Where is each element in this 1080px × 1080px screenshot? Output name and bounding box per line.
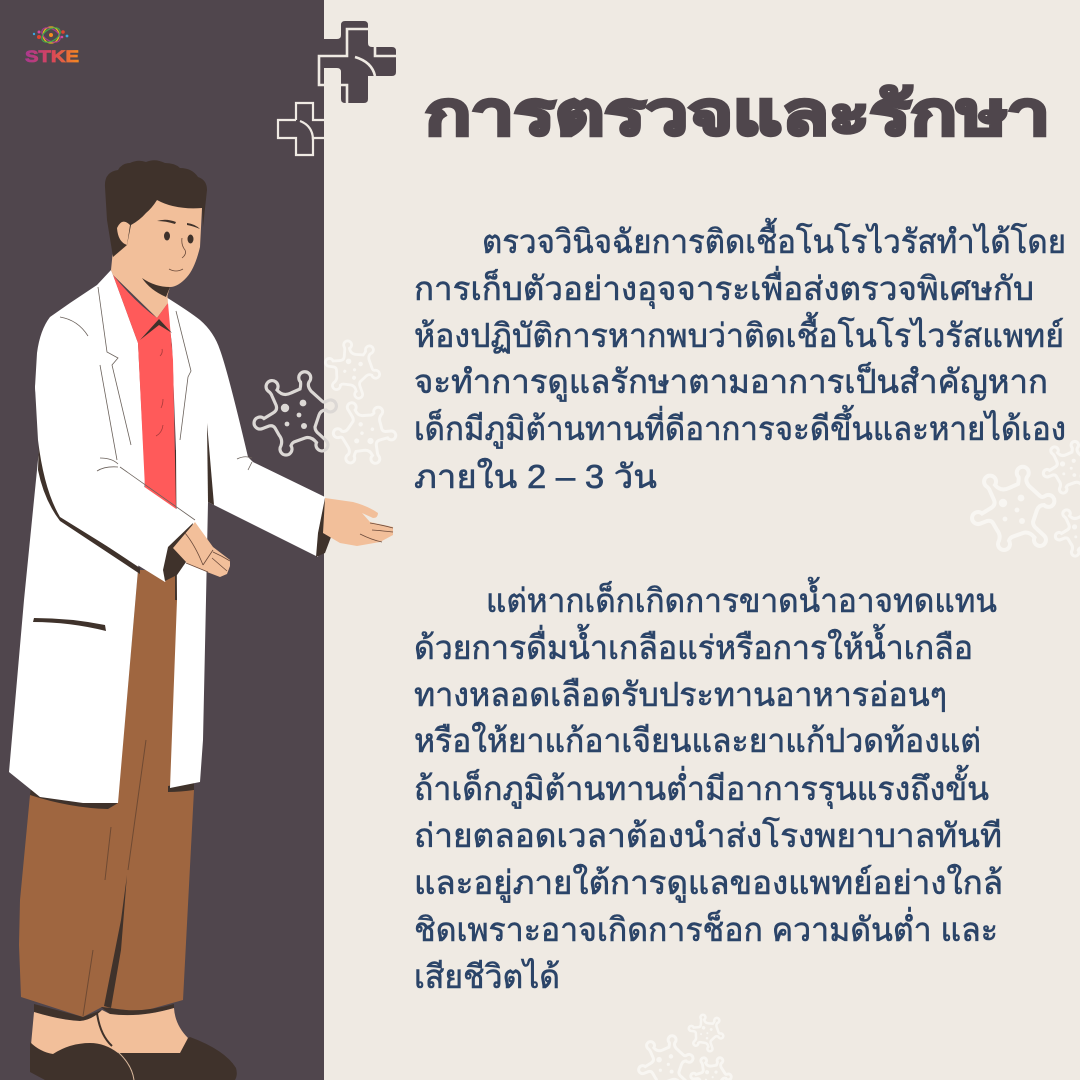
illustration: doctor (9, 160, 393, 1080)
icon: virus right centre (972, 467, 1054, 550)
icon: large medical cross (319, 21, 403, 113)
shoes (30, 1037, 237, 1080)
icon: virus lower right of doctor (327, 397, 402, 473)
text block: paragraph one: ภายใน 2 – 3 วัน (414, 458, 657, 495)
text block: paragraph two: ทางหลอดเลือดรับประทานอาหารอ่อนๆ (414, 676, 947, 713)
coat right panel (166, 297, 325, 788)
logo: STKE (25, 25, 79, 66)
hand left (173, 522, 230, 577)
icon: small medical cross (278, 103, 326, 155)
text block: paragraph one: ห้องปฏิบัติการหากพบว่าติดเชื้อโนโรไวรัสแพทย์ (414, 312, 1064, 354)
coat left panel (9, 270, 145, 803)
text block: paragraph two: ชิดเพราะอาจเกิดการช็อก ความดันต่ำ และ (414, 907, 998, 948)
icon: virus bottom right (687, 1052, 735, 1080)
neck and face (111, 200, 202, 297)
shirt (113, 275, 176, 510)
trouser shadows (30, 450, 194, 1021)
icon: virus bottom top (683, 1008, 730, 1055)
text block: paragraph two: เสียชีวิตได้ (414, 958, 560, 995)
text block: paragraph two (414, 577, 1003, 995)
icon: virus right lower (1055, 504, 1080, 556)
icon: virus upper right of doctor (316, 331, 390, 405)
coat back shadow (38, 440, 140, 574)
text block: paragraph two: แต่หากเด็กเกิดการขาดน้ำอาจทดแทน (486, 577, 997, 619)
collar fold (140, 319, 172, 340)
coat lapel lines (60, 287, 252, 520)
hair (105, 160, 207, 257)
icon: virus outline on dark panel (254, 372, 336, 455)
button marks (156, 349, 163, 436)
trouser crease lines (83, 740, 146, 1016)
text block: paragraph two: ถ้าเด็กภูมิต้านทานต่ำมีอาการรุนแรงถึงขั้น (414, 765, 989, 809)
facial features (157, 220, 200, 271)
icon: virus right upper (1043, 441, 1080, 493)
ear (117, 222, 130, 245)
text block: paragraph two: หรือให้ยาแก้อาเจียนและยาแก้ปวดท้องแต่ (414, 722, 981, 759)
text block: paragraph one: การเก็บตัวอย่างอุจจาระเพื่อส่งตรวจพิเศษกับ (414, 266, 1034, 309)
coat inner shadows (207, 423, 214, 505)
ankles (31, 1008, 188, 1060)
chin shadow (142, 278, 170, 297)
text block: paragraph two: และอยู่ภายใต้การดูแลของแพทย์อย่างใกล้ (414, 864, 1003, 903)
left sleeve (35, 320, 195, 582)
text block: paragraph two: ถ่ายตลอดเวลาต้องนำส่งโรงพยาบาลทันที (414, 817, 1002, 854)
text block: paragraph one: จะทำการดูแลรักษาตามอาการเป็นสำคัญหาก (414, 362, 1048, 402)
icon: virus bottom left (639, 1036, 693, 1080)
title: การตรวจและรักษา (425, 81, 1050, 147)
trousers (19, 570, 194, 1017)
logo: STKE: STKE (25, 47, 79, 66)
panel: dark left column (0, 0, 324, 1080)
pocket (33, 618, 106, 631)
text block: paragraph one (414, 218, 1066, 495)
hand right (323, 498, 393, 546)
text block: paragraph two: ด้วยการดื่มน้ำเกลือแร่หรือการให้น้ำเกลือ (414, 624, 973, 666)
cuff left (163, 523, 193, 581)
cuff right (316, 498, 331, 557)
skin under chin (113, 275, 168, 318)
